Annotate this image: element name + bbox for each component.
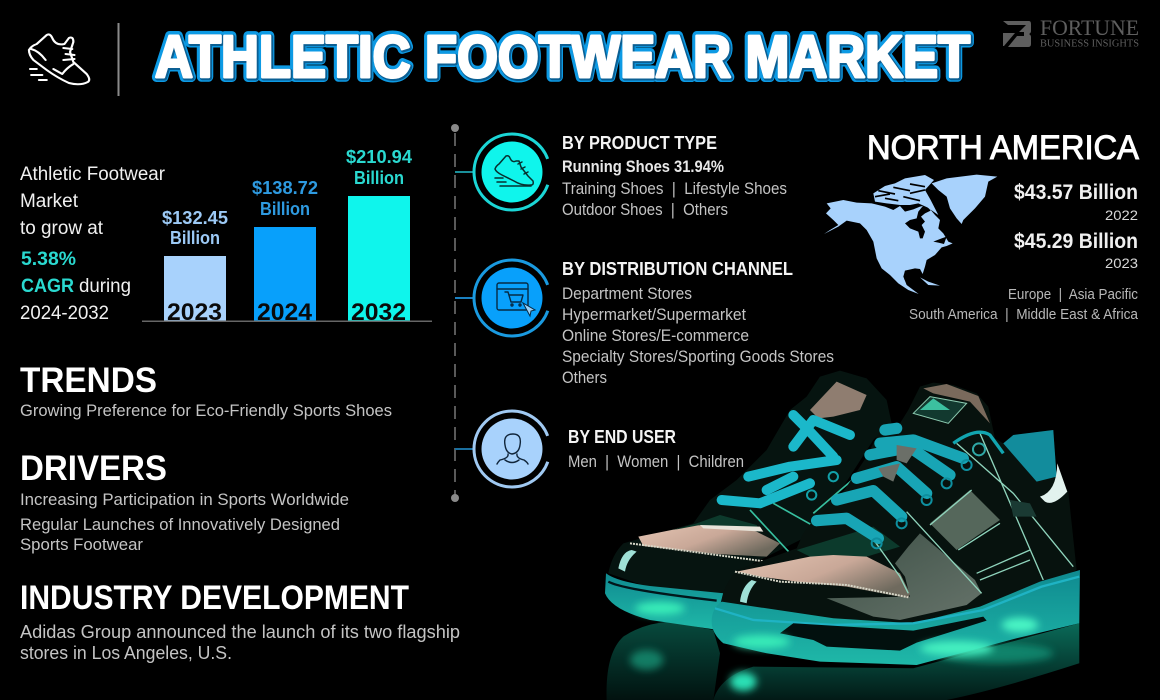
bar 2023 bbox=[162, 208, 228, 326]
image: pair of glowing sneakers bbox=[605, 371, 1080, 700]
bar 2024: 2024 bbox=[257, 299, 313, 326]
text block: drivers: DRIVERS bbox=[20, 449, 167, 488]
divider line bbox=[118, 23, 120, 96]
text block: by end user bbox=[568, 427, 744, 471]
text block: by distribution channel bbox=[562, 259, 834, 387]
bar 2024 bbox=[252, 178, 318, 326]
logo: Fortune Business Insights bbox=[1003, 15, 1139, 50]
bar 2023: 2023 bbox=[167, 299, 222, 326]
text block: north america values: South America | Middle East & Africa bbox=[909, 306, 1139, 323]
text block: by distribution channel: Hypermarket/Supermarket bbox=[562, 305, 746, 324]
text block: drivers: Regular Launches of Innovatively Designed bbox=[20, 515, 340, 534]
text block: by distribution channel: Specialty Stores/Sporting Goods Stores bbox=[562, 347, 834, 366]
front shoe bbox=[712, 383, 1080, 665]
text block: drivers bbox=[20, 449, 349, 554]
bar 2032: $210.94 bbox=[346, 147, 412, 167]
text block: trends bbox=[20, 361, 392, 420]
title: ATHLETIC FOOTWEAR MARKET bbox=[156, 25, 971, 91]
bar 2024: Billion bbox=[260, 199, 310, 219]
text block: north america values bbox=[909, 181, 1139, 323]
text block: by distribution channel: Department Stores bbox=[562, 284, 692, 303]
reflection bbox=[607, 622, 1079, 700]
icon: product type badge bbox=[474, 134, 550, 210]
text block: by product type: Outdoor Shoes | Others bbox=[562, 200, 728, 219]
back shoe bbox=[605, 371, 892, 629]
text: CAGR statement: 2024-2032 bbox=[20, 303, 109, 324]
text block: by distribution channel: Others bbox=[562, 368, 607, 387]
text block: north america values: 2023 bbox=[1105, 255, 1138, 271]
heading: north america: NORTH AMERICA bbox=[867, 129, 1139, 167]
text block: north america values: Europe | Asia Pacific bbox=[1008, 286, 1138, 303]
text: CAGR statement: CAGR bbox=[21, 276, 74, 297]
text: CAGR statement: to grow at bbox=[20, 218, 104, 239]
icon: distribution channel badge bbox=[474, 260, 550, 336]
text block: industry development: Adidas Group announced the launch of its two flagship bbox=[20, 622, 460, 642]
text block: by product type: Running Shoes 31.94% bbox=[562, 157, 724, 176]
logo: Fortune Business Insights: FORTUNE bbox=[1040, 15, 1139, 40]
bar 2032 bbox=[346, 147, 412, 326]
text block: industry development bbox=[20, 579, 460, 663]
icon: running shoe header bbox=[29, 34, 89, 84]
bar 2032: 2032 bbox=[351, 299, 406, 326]
text block: industry development: INDUSTRY DEVELOPMENT bbox=[20, 579, 409, 617]
text block: by end user: Men | Women | Children bbox=[568, 452, 744, 471]
logo: Fortune Business Insights: BUSINESS INSIGHTS bbox=[1040, 38, 1139, 50]
text block: north america values: $45.29 Billion bbox=[1014, 230, 1138, 253]
text: CAGR statement bbox=[20, 164, 166, 324]
text block: drivers: Sports Footwear bbox=[20, 535, 143, 554]
text block: drivers: Increasing Participation in Sports Worldwide bbox=[20, 490, 349, 509]
text block: by end user: BY END USER bbox=[568, 427, 676, 447]
bar 2032: Billion bbox=[354, 168, 404, 188]
text: CAGR statement: during bbox=[79, 276, 131, 297]
text: CAGR statement: Market bbox=[20, 191, 79, 212]
bar 2024: $138.72 bbox=[252, 178, 318, 198]
text block: by distribution channel: BY DISTRIBUTION CHANNEL bbox=[562, 259, 793, 279]
timeline connector bbox=[451, 124, 475, 502]
bar chart bbox=[142, 147, 432, 326]
text block: by product type: BY PRODUCT TYPE bbox=[562, 133, 717, 153]
text block: industry development: stores in Los Angeles, U.S. bbox=[20, 643, 232, 663]
text block: by product type: Training Shoes | Lifestyle Shoes bbox=[562, 179, 787, 198]
bar 2023: Billion bbox=[170, 228, 220, 248]
text: CAGR statement: 5.38% bbox=[21, 249, 76, 270]
text block: by distribution channel: Online Stores/E-commerce bbox=[562, 326, 749, 345]
text block: north america values: 2022 bbox=[1105, 207, 1138, 223]
title: ATHLETIC FOOTWEAR MARKET bbox=[155, 24, 970, 90]
icon: end user badge bbox=[474, 411, 550, 487]
text block: trends: TRENDS bbox=[20, 361, 157, 400]
title: ATHLETIC FOOTWEAR MARKET bbox=[155, 24, 970, 90]
text block: trends: Growing Preference for Eco-Friendly Sports Shoes bbox=[20, 401, 392, 420]
bar 2023: $132.45 bbox=[162, 208, 228, 228]
text block: by product type bbox=[562, 133, 787, 219]
text: CAGR statement: Athletic Footwear bbox=[20, 164, 166, 185]
map: north america bbox=[824, 175, 997, 294]
text block: north america values: $43.57 Billion bbox=[1014, 181, 1138, 204]
